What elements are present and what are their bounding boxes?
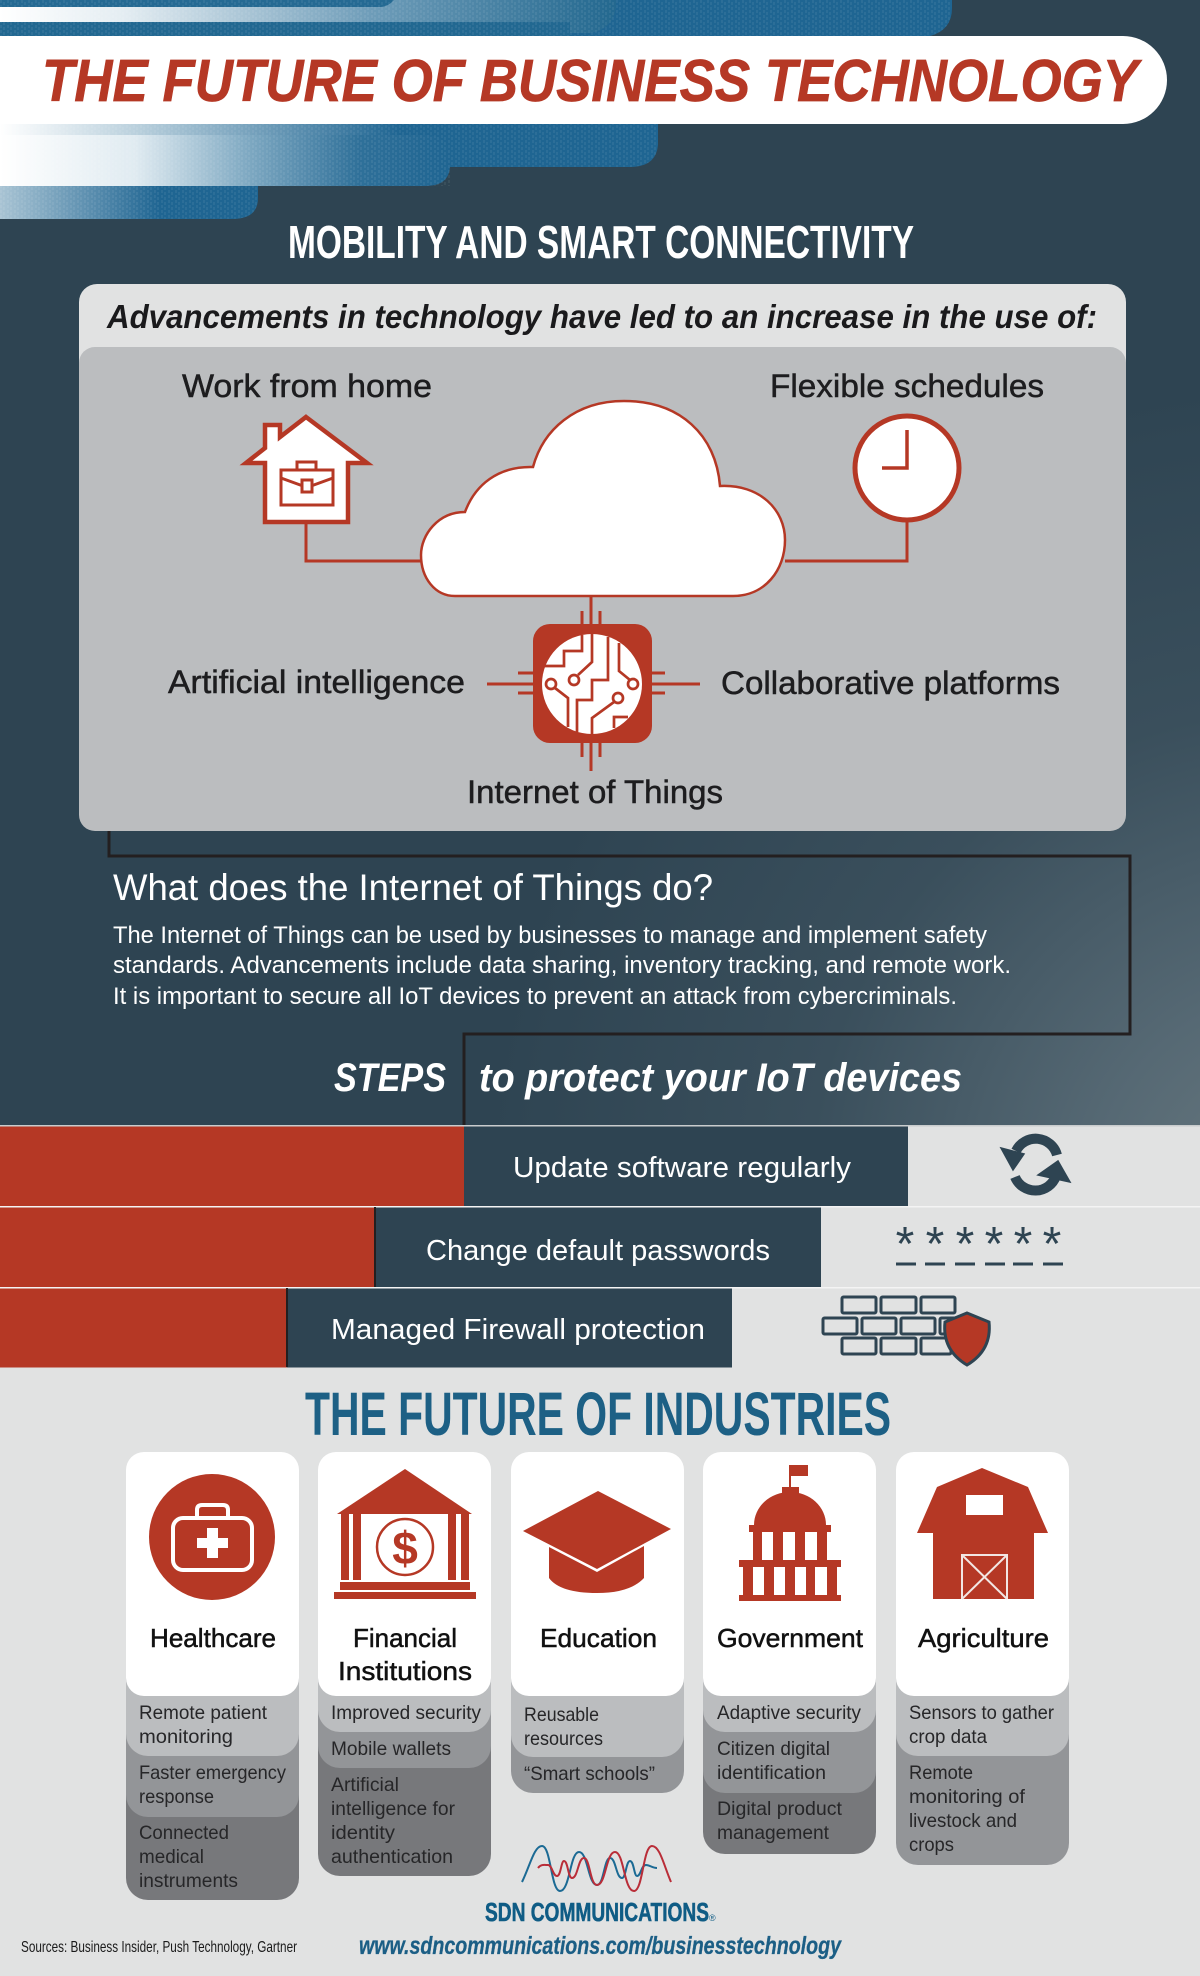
icon: house with briefcase bbox=[246, 417, 367, 522]
step 3 bar bbox=[287, 1288, 732, 1368]
icon: password asterisks: * bbox=[926, 1218, 944, 1271]
logo: sdn communications bbox=[485, 1846, 716, 1927]
panel: technology use bbox=[79, 284, 1126, 831]
heading: to protect your iot devices: to protect your IoT devices bbox=[479, 1056, 962, 1100]
body text: standards. Advancements include data sharing, inventory tracking, and remote work. bbox=[113, 952, 1011, 979]
layer 1: Adaptive security bbox=[717, 1702, 861, 1724]
connector lines bbox=[306, 521, 907, 624]
layer 1 bbox=[318, 1660, 491, 1732]
step 3 red bar bbox=[0, 1288, 287, 1368]
layer 3: Connected bbox=[139, 1822, 229, 1844]
icon: password asterisks: * bbox=[1043, 1218, 1061, 1271]
step 2 bar: Change default passwords bbox=[426, 1235, 770, 1267]
card bbox=[896, 1452, 1069, 1696]
body text: The Internet of Things can be used by businesses to manage and implement safety bbox=[113, 922, 988, 949]
icon: password asterisks: * bbox=[985, 1218, 1003, 1271]
logo waveform bbox=[522, 1846, 671, 1891]
layer 3: authentication bbox=[331, 1846, 453, 1868]
icon: password asterisks: * bbox=[1014, 1218, 1032, 1271]
layer 3: Digital product bbox=[717, 1798, 843, 1820]
card title: Institutions bbox=[338, 1656, 472, 1686]
icon: password asterisks: * bbox=[896, 1218, 914, 1271]
icon: circuit chip bbox=[487, 611, 700, 771]
layer 1: Reusable bbox=[524, 1704, 599, 1726]
layer 2: Faster emergency bbox=[139, 1762, 286, 1784]
heading: the future of industries: THE FUTURE OF INDUSTRIES bbox=[305, 1380, 891, 1448]
heading: steps: STEPS bbox=[334, 1056, 446, 1100]
layer 1 bbox=[896, 1660, 1069, 1756]
step 3 bar: Managed Firewall protection bbox=[331, 1314, 705, 1346]
body text: It is important to secure all IoT devices to prevent an attack from cybercriminals. bbox=[113, 983, 957, 1010]
icon: refresh arrows bbox=[1001, 1139, 1070, 1191]
panel heading: Advancements in technology have led to an increase in the use of: bbox=[106, 298, 1097, 335]
card bbox=[318, 1452, 491, 1696]
layer 2: identification bbox=[717, 1762, 826, 1784]
layer 3: instruments bbox=[139, 1870, 238, 1892]
card title bbox=[338, 1623, 472, 1686]
layer 1: Remote patient bbox=[139, 1702, 268, 1724]
label: collaborative platforms: Collaborative platforms bbox=[721, 665, 1060, 701]
icon: medical case bbox=[149, 1474, 275, 1600]
layer 1: crop data bbox=[909, 1726, 987, 1748]
panel: agriculture bbox=[896, 1452, 1069, 1865]
icon: clock bbox=[855, 416, 959, 520]
layer 1 bbox=[703, 1660, 876, 1732]
blue streaks below banner bbox=[0, 120, 658, 219]
icon: graduation cap bbox=[523, 1491, 671, 1593]
steps rows bbox=[0, 1125, 1200, 1368]
layer 3: intelligence for bbox=[331, 1798, 455, 1820]
icon: barn bbox=[917, 1468, 1048, 1599]
step 1 bar: Update software regularly bbox=[513, 1152, 851, 1184]
layer 3: Artificial bbox=[331, 1774, 399, 1796]
panel: financial institutions bbox=[318, 1452, 491, 1876]
layer 2: livestock and bbox=[909, 1810, 1017, 1832]
icon: bank bbox=[334, 1469, 476, 1599]
card title: Education bbox=[540, 1623, 657, 1653]
card bbox=[126, 1452, 299, 1696]
step 1 red bar bbox=[0, 1126, 464, 1206]
layer 1: Sensors to gather bbox=[909, 1702, 1054, 1724]
layer 2: crops bbox=[909, 1834, 954, 1856]
label: artificial intelligence: Artificial intelligence bbox=[168, 664, 465, 700]
layer 2 bbox=[126, 1660, 299, 1817]
layer 3 bbox=[126, 1660, 299, 1900]
icon: bank: $ bbox=[392, 1522, 418, 1574]
layer 1: resources bbox=[524, 1728, 603, 1750]
sources: Sources: Business Insider, Push Technology, Gartner bbox=[21, 1939, 297, 1956]
layer 1 bbox=[511, 1660, 684, 1757]
panel: healthcare bbox=[126, 1452, 299, 1900]
icon: capitol building bbox=[739, 1465, 841, 1601]
card title: Financial bbox=[353, 1623, 457, 1653]
layer 2: “Smart schools” bbox=[524, 1763, 655, 1785]
subheading: What does the Internet of Things do? bbox=[113, 867, 713, 908]
card title: Agriculture bbox=[918, 1623, 1049, 1653]
icon: password asterisks bbox=[896, 1218, 1063, 1271]
icon: cloud bbox=[421, 401, 785, 596]
layer 3: medical bbox=[139, 1846, 204, 1868]
step 2 bar bbox=[375, 1208, 821, 1287]
website url: www.sdncommunications.com/businesstechnology bbox=[359, 1932, 842, 1960]
logo wordmark: SDN COMMUNICATIONS bbox=[485, 1897, 709, 1927]
label: internet of things: Internet of Things bbox=[467, 774, 723, 810]
card title: Healthcare bbox=[150, 1623, 276, 1653]
title banner bbox=[0, 36, 1167, 124]
dark background bbox=[0, 0, 1200, 1130]
layer 3 bbox=[703, 1660, 876, 1854]
layer 3: management bbox=[717, 1822, 830, 1844]
layer 2 bbox=[318, 1660, 491, 1768]
layer 3: identity bbox=[331, 1822, 395, 1844]
layer 2: response bbox=[139, 1786, 214, 1808]
icon: password asterisks: * bbox=[956, 1218, 974, 1271]
layer 2 bbox=[896, 1660, 1069, 1865]
layer 1 bbox=[126, 1660, 299, 1756]
layer 1: Improved security bbox=[331, 1702, 481, 1724]
layer 2: Remote bbox=[909, 1762, 973, 1784]
blue streaks above banner bbox=[0, 0, 952, 36]
icon: firewall with shield bbox=[823, 1297, 989, 1365]
label: flexible schedules: Flexible schedules bbox=[770, 368, 1044, 404]
light lower section background bbox=[0, 1126, 1200, 1976]
step 1 bar bbox=[464, 1126, 908, 1206]
layer 2 bbox=[511, 1660, 684, 1793]
layer 2: Citizen digital bbox=[717, 1738, 830, 1760]
label: work from home: Work from home bbox=[182, 368, 432, 404]
body text bbox=[113, 922, 1011, 1010]
layer 2: Mobile wallets bbox=[331, 1738, 451, 1760]
registered mark: ® bbox=[709, 1913, 716, 1923]
panel: government bbox=[703, 1452, 876, 1854]
step 2 red bar bbox=[0, 1208, 375, 1287]
layer 2 bbox=[703, 1660, 876, 1793]
card bbox=[511, 1452, 684, 1696]
layer 2: monitoring of bbox=[909, 1786, 1026, 1808]
card bbox=[703, 1452, 876, 1696]
heading: mobility and smart connectivity: MOBILITY AND SMART CONNECTIVITY bbox=[288, 216, 914, 268]
card title: Government bbox=[717, 1623, 864, 1653]
layer 3 bbox=[318, 1660, 491, 1876]
text block: what does the internet of things do bbox=[113, 867, 1011, 1010]
panel: education bbox=[511, 1452, 684, 1793]
layer 1: monitoring bbox=[139, 1726, 233, 1748]
stair outline bbox=[109, 831, 1130, 1126]
